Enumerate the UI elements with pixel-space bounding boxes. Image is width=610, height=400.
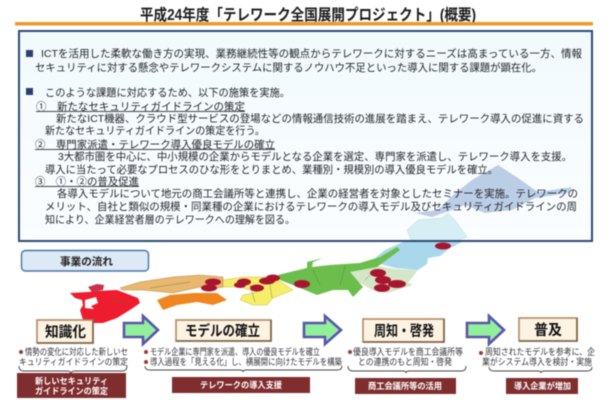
step 1 description: キュリティガイドラインの策定 xyxy=(19,356,128,367)
flow heading: 事業の流れ xyxy=(60,255,114,268)
step 3 description: 優良導入モデルを商工会議所等 xyxy=(353,346,463,357)
step 4 heading: 普及 xyxy=(534,321,562,339)
title underline bar xyxy=(15,22,593,26)
step 4 outcome: 導入企業が増加 xyxy=(514,380,571,391)
measure 3 xyxy=(35,175,578,226)
measure 3: ③ ①・②の普及促進 xyxy=(35,175,139,188)
step 2 outcome: テレワークの導入支援 xyxy=(200,379,282,390)
arrow 2 xyxy=(304,316,341,344)
measure 3: 各導入モデルについて地元の商工会議所等と連携し、企業の経営者を対象としたセミナーを実施。テレワークの xyxy=(57,187,578,200)
background paragraph: ICTを活用した柔軟な働き方の実現、業務継続性等の観点からテレワークに対するニーズは高まっている一方、情報 xyxy=(41,47,582,60)
step 4 description xyxy=(479,346,595,367)
measures intro: このような課題に対応するため、以下の施策を実施。 xyxy=(45,86,290,99)
measure 3: メリット、自社と類似の規模・同業種の企業におけるテレワークの導入モデル及びセキュリティガイドラインの周 xyxy=(45,200,577,213)
measure 2: 導入に当たって必要なプロセスのひな形をとりまとめ、業種別・規模別の導入優良モデルを確立。 xyxy=(45,163,498,176)
bullet 1 xyxy=(26,50,33,57)
measure 1: 新たなセキュリティガイドラインの策定を行う。 xyxy=(45,124,265,137)
step 4: adoption xyxy=(479,318,595,394)
step 2 description: モデル企業に専門家を派遣、導入の優良モデルを確立 xyxy=(150,346,320,357)
map of Japan xyxy=(70,165,572,323)
measure 1: 新たなICT機器、クラウド型サービスの登場などの情報通信技術の進展を踏まえ、テレワーク導入の促進に資する xyxy=(56,112,584,125)
step 4 description: 周知されたモデルを参考に、企 xyxy=(485,346,595,357)
step 3 description: との連携のもと周知・啓発 xyxy=(358,356,452,367)
map: northern Tohoku xyxy=(407,213,467,242)
step 1 outcome: 新しいセキュリティ xyxy=(35,375,108,386)
step 4 brace xyxy=(489,367,592,373)
step 2 heading: モデルの確立 xyxy=(185,322,260,340)
panel: border xyxy=(19,31,592,241)
step 1 heading: 知識化 xyxy=(45,324,86,341)
step 1 description: 情勢の変化に対応した新しいセ xyxy=(25,346,128,357)
map: Chugoku xyxy=(120,275,223,293)
map: Kansai xyxy=(223,277,293,305)
measure 1 xyxy=(36,100,584,137)
step 1: knowledge xyxy=(17,320,128,398)
map: Kyushu inlet xyxy=(85,297,98,309)
step 2 outcome xyxy=(172,377,310,393)
background paragraph: セキュリティに対する懸念やテレワークシステムに関するノウハウ不足といった導入に関する課題が顕在化。 xyxy=(35,61,542,74)
flow heading xyxy=(22,250,148,271)
step 2 heading xyxy=(176,320,271,341)
background paragraph xyxy=(35,47,582,74)
measure 1: ① 新たなセキュリティガイドラインの策定 xyxy=(36,100,245,113)
bullet 2 xyxy=(26,88,33,95)
map: Kanto xyxy=(350,266,418,293)
title: 平成24年度「テレワーク全国展開プロジェクト」(概要) xyxy=(140,5,476,24)
step 4 description: 業がシステム導入を検討・実施 xyxy=(482,356,592,367)
measure 2: 3大都市圏を中心に、中小規模の企業からモデルとなる企業を選定、専門家を派遣し、テレワーク導入を支援。 xyxy=(58,150,572,163)
map: region lines xyxy=(110,266,375,304)
measure 3: 知により、企業経営者層のテレワークへの理解を図る。 xyxy=(45,213,295,226)
step 2 brace xyxy=(145,366,342,372)
map: Kyushu xyxy=(70,290,140,323)
step 3 brace xyxy=(348,366,466,373)
step 1 brace xyxy=(19,366,127,374)
map: Shikoku xyxy=(157,293,227,310)
step 1 outcome xyxy=(17,373,126,398)
map: Hokkaido xyxy=(415,165,572,217)
step 1 outcome: ガイドラインの策定 xyxy=(35,385,108,396)
step 2: model establishment xyxy=(144,320,342,393)
map: model-site pins xyxy=(201,242,451,292)
step 1 description xyxy=(19,346,128,367)
step 2 description: 導入過程を「見える化」し、横展開に向けたモデルを構築 xyxy=(150,356,342,367)
measure 2: ② 専門家派遣・テレワーク導入優良モデルの確立 xyxy=(35,138,275,151)
step 3 heading: 周知・啓発 xyxy=(374,322,434,340)
panel text xyxy=(26,47,584,226)
map: Chubu xyxy=(278,247,400,297)
map: southern Tohoku xyxy=(375,242,462,270)
arrow 1 xyxy=(124,316,158,344)
step 3 description xyxy=(348,346,463,367)
arrow 3 xyxy=(467,316,504,344)
step 3 outcome: 商工会議所等の活用 xyxy=(368,380,442,391)
panel: background xyxy=(19,31,592,241)
measure 2 xyxy=(35,138,572,176)
map: Tsushima xyxy=(88,284,104,292)
step 3: awareness xyxy=(348,319,466,394)
step 2 description xyxy=(144,346,342,367)
